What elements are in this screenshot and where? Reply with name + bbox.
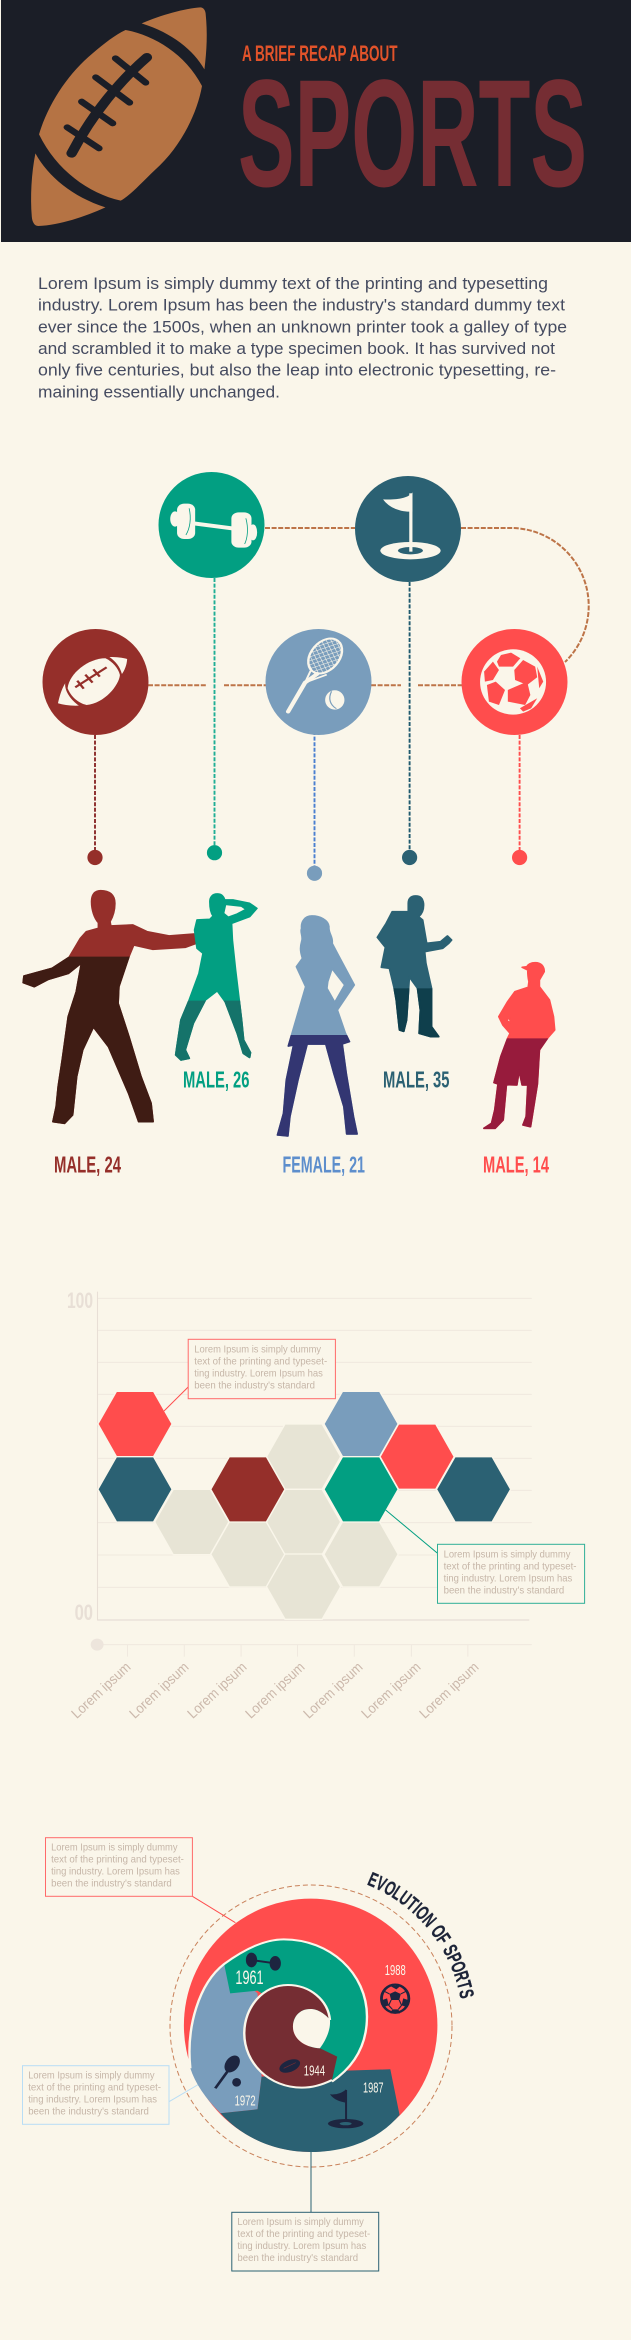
callout: light blue: Lorem Ipsum is simply dummy — [28, 2069, 155, 2081]
x axis labels: Lorem ipsum — [358, 1659, 424, 1721]
spiral: 1944 brick — [244, 1985, 337, 2088]
evolution title: T — [452, 1978, 476, 1992]
label: female 21: FEMALE, 21 — [282, 1152, 365, 1178]
year: 1944: 1944 — [304, 2063, 325, 2080]
evolution title: L — [388, 1882, 407, 1905]
year: 1972: 1972 — [235, 2093, 256, 2110]
intro paragraph: and scrambled it to make a type specimen book. It has survived not — [38, 339, 555, 358]
evolution title: S — [454, 1987, 478, 2000]
inner edge highlight — [244, 1985, 332, 2088]
evolution title — [365, 1868, 478, 2000]
evolution title: N — [418, 1909, 441, 1931]
intro paragraph: maining essentially unchanged. — [38, 382, 280, 401]
callout: teal hexagon: ting industry. Lorem Ipsum has — [444, 1572, 572, 1584]
callout: light blue — [22, 2066, 169, 2124]
callout: dark teal: text of the printing and typeset- — [237, 2228, 371, 2240]
evolution title: O — [380, 1876, 400, 1901]
callout: coral: ting industry. Lorem Ipsum has — [51, 1865, 180, 1877]
label: male 14: MALE, 14 — [483, 1152, 549, 1178]
label: male 26: MALE, 26 — [183, 1066, 250, 1092]
evolution title: V — [372, 1872, 391, 1896]
evolution title: R — [449, 1968, 474, 1984]
sport badge: golf — [355, 476, 461, 582]
intro paragraph: only five centuries, but also the leap into electronic typesetting, re- — [38, 361, 556, 380]
evolution title: O — [446, 1958, 471, 1976]
x axis labels: Lorem ipsum — [242, 1659, 308, 1721]
spiral: 1988 coral — [184, 1899, 437, 2152]
callout: dark teal: ting industry. Lorem Ipsum has — [237, 2240, 366, 2252]
callout connector lines — [169, 1896, 311, 2212]
evolution title: F — [432, 1929, 455, 1948]
sport badge: soccer — [462, 629, 568, 735]
figure: male 35 — [377, 896, 451, 1037]
evolution title: P — [442, 1950, 466, 1967]
figure: male 26 — [176, 894, 257, 1060]
sport badge: tennis — [266, 629, 372, 735]
callout: coral: Lorem Ipsum is simply dummy — [51, 1841, 178, 1853]
spiral: 1987 dark teal — [221, 2069, 400, 2152]
callout: coral hexagon: been the industry's standard — [194, 1379, 315, 1391]
callout: dark teal — [232, 2212, 379, 2271]
evolution title: U — [395, 1887, 416, 1910]
intro paragraph: ever since the 1500s, when an unknown printer took a galley of type — [38, 317, 567, 336]
x axis labels: Lorem ipsum — [300, 1659, 366, 1721]
callout: light blue: been the industry's standard — [28, 2105, 149, 2117]
figure: male 24 — [22, 890, 196, 1124]
subtitle: A BRIEF RECAP ABOUT — [242, 41, 398, 66]
icon: tennis racket and ball — [288, 634, 349, 712]
evolution title: T — [402, 1893, 423, 1916]
evolution title: O — [411, 1902, 434, 1925]
intro paragraph: industry. Lorem Ipsum has been the industry's standard dummy text — [38, 296, 565, 315]
spiral edge highlight — [189, 1939, 367, 2082]
evolution title: E — [365, 1868, 381, 1892]
year: 1961: 1961 — [235, 1967, 264, 1989]
evolution spiral chart — [184, 1899, 437, 2152]
icon: golf flag — [328, 2089, 363, 2128]
line end dots — [87, 845, 527, 881]
x axis labels: Lorem ipsum — [416, 1659, 482, 1721]
label: male 35: MALE, 35 — [383, 1066, 450, 1092]
x axis labels: Lorem ipsum — [126, 1659, 192, 1721]
callout: teal hexagon: been the industry's standard — [444, 1584, 564, 1596]
icon: tennis racket and ball — [215, 2053, 243, 2088]
callout: dark teal: been the industry's standard — [237, 2252, 358, 2264]
callout: light blue: ting industry. Lorem Ipsum has — [28, 2093, 157, 2105]
chart grid and axes — [97, 1292, 532, 1620]
spiral centre hole — [293, 2009, 330, 2048]
evolution outer dashed ring — [170, 1885, 452, 2167]
callout: dark teal: Lorem Ipsum is simply dummy — [237, 2216, 364, 2228]
figure: female 21 — [278, 916, 357, 1136]
icon: barbell — [170, 504, 257, 548]
callout: teal hexagon: Lorem Ipsum is simply dummy — [444, 1548, 571, 1560]
callout: coral: text of the printing and typeset- — [51, 1853, 184, 1865]
axis label: 00: 00 — [75, 1600, 93, 1625]
callout: light blue: text of the printing and typeset- — [28, 2081, 161, 2093]
icon: soccer ball — [480, 649, 546, 715]
sport badge: football — [42, 629, 148, 735]
hexagons — [98, 1391, 511, 1619]
intro paragraph — [38, 274, 567, 401]
callout: coral hexagon — [164, 1339, 335, 1411]
callout: coral hexagon: text of the printing and typeset- — [194, 1355, 328, 1367]
icon: soccer ball — [381, 1985, 409, 2013]
spiral: 1961 teal — [224, 1939, 367, 2082]
icon: dumbbell — [246, 1953, 281, 1971]
callout: coral: been the industry's standard — [51, 1877, 172, 1889]
callout: teal hexagon — [386, 1510, 585, 1603]
callout: teal hexagon: text of the printing and typeset- — [444, 1560, 577, 1572]
sport badge: barbell — [158, 472, 264, 578]
spiral: 1972 blue — [189, 1964, 262, 2113]
evolution title: I — [408, 1899, 426, 1918]
evolution title: O — [426, 1921, 450, 1942]
callout: coral — [46, 1838, 192, 1896]
callout: coral hexagon: Lorem Ipsum is simply dummy — [194, 1343, 322, 1355]
x axis labels: Lorem ipsum — [184, 1659, 250, 1721]
figure: male 14 — [484, 963, 555, 1128]
dashed connector path between sports — [148, 528, 589, 685]
intro paragraph: Lorem Ipsum is simply dummy text of the printing and typesetting — [38, 274, 548, 293]
callout: coral hexagon: ting industry. Lorem Ipsum has — [194, 1367, 323, 1379]
icon: golf flag — [380, 492, 441, 559]
hexagon chart — [67, 1288, 532, 1721]
x axis slider — [91, 1639, 532, 1657]
year: 1988: 1988 — [385, 1962, 406, 1979]
drop lines to figures — [95, 578, 520, 866]
label: male 24: MALE, 24 — [54, 1152, 121, 1178]
x axis labels — [68, 1659, 482, 1721]
year: 1987: 1987 — [363, 2080, 384, 2097]
icon: football — [277, 2056, 303, 2076]
icon: football — [58, 657, 127, 706]
evolution title: S — [438, 1941, 462, 1959]
icon: american football — [31, 7, 207, 226]
x axis labels: Lorem ipsum — [68, 1659, 134, 1721]
axis label: 100: 100 — [67, 1288, 93, 1313]
header band — [1, 0, 631, 242]
